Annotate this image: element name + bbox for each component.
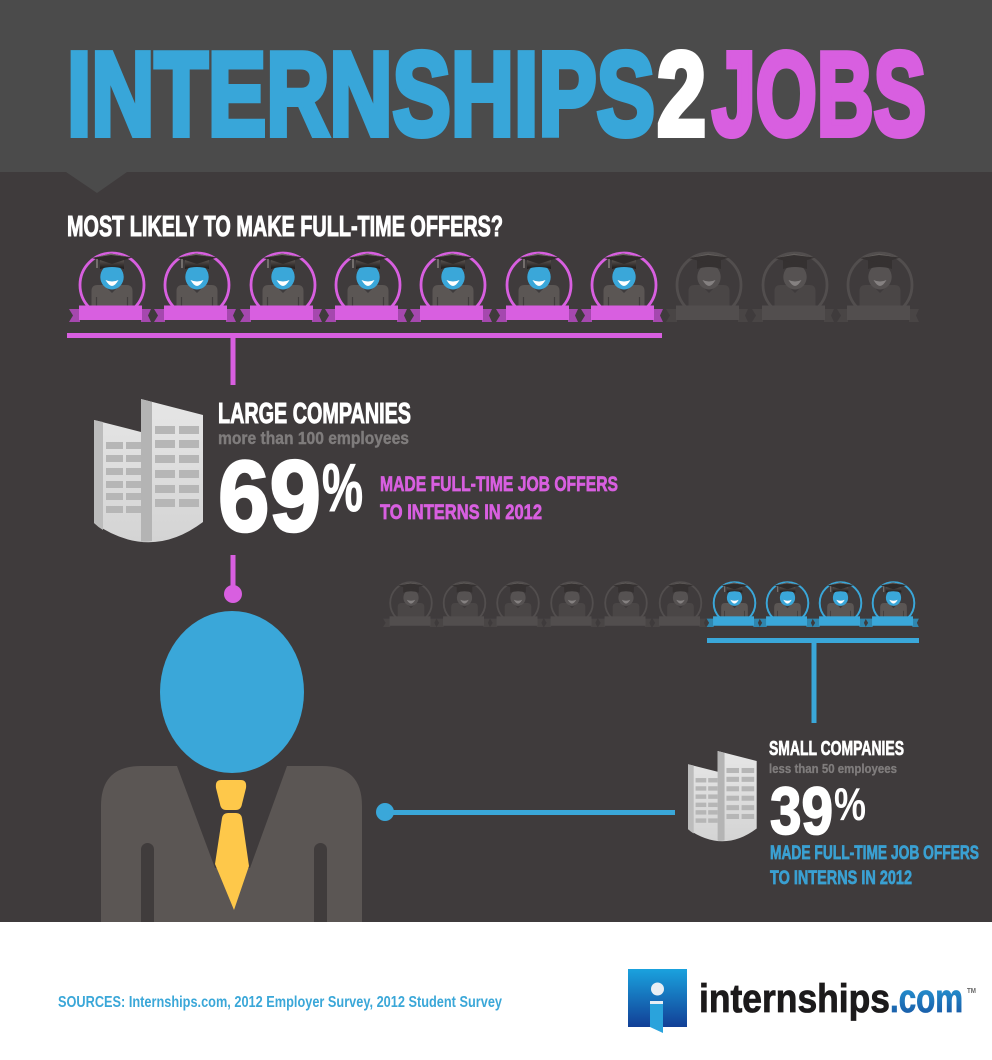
connector: pink bracket bbox=[67, 336, 662, 385]
connector: blue line with dot bbox=[376, 803, 675, 821]
large companies text block bbox=[218, 398, 618, 553]
large companies text block: % bbox=[322, 450, 363, 526]
small companies text block bbox=[769, 738, 979, 889]
large companies text block: more than 100 employees bbox=[218, 428, 409, 448]
header banner bbox=[0, 0, 992, 193]
large companies text block: 69 bbox=[218, 441, 321, 553]
title: INTERNSHIPS bbox=[67, 28, 655, 161]
small companies text block: TO INTERNS IN 2012 bbox=[770, 867, 912, 889]
icon row: small companies, 4 of 10 graduates bbox=[383, 582, 919, 627]
footer background bbox=[0, 922, 992, 1060]
small companies text block: less than 50 employees bbox=[769, 761, 897, 776]
title: 2 bbox=[657, 28, 706, 161]
large companies text block: MADE FULL-TIME JOB OFFERS bbox=[380, 473, 618, 496]
logo wordmark: internships bbox=[699, 977, 890, 1021]
head bbox=[160, 611, 304, 773]
icon: large building bbox=[94, 399, 203, 542]
connector: pink line with dot bbox=[224, 555, 242, 603]
logo: internships.com bbox=[628, 969, 976, 1033]
logo: internships.com: .com bbox=[890, 977, 963, 1021]
icon row: large companies, 7 of 10 graduates bbox=[69, 253, 919, 322]
logo mark bbox=[628, 969, 687, 1033]
connector: blue bracket bbox=[707, 640, 919, 723]
tie bbox=[215, 780, 249, 910]
sources text: SOURCES: Internships.com, 2012 Employer Survey, 2012 Student Survey bbox=[58, 994, 502, 1011]
large companies text block: LARGE COMPANIES bbox=[218, 398, 411, 430]
small companies text block: 39 bbox=[770, 774, 833, 849]
logo: internships.com: TM bbox=[967, 988, 976, 995]
suit bbox=[101, 766, 362, 922]
large companies text block: TO INTERNS IN 2012 bbox=[380, 501, 542, 524]
small companies text block: SMALL COMPANIES bbox=[769, 738, 904, 760]
person figure with suit and tie bbox=[101, 611, 362, 922]
section heading: MOST LIKELY TO MAKE FULL-TIME OFFERS? bbox=[67, 211, 503, 243]
small companies text block: % bbox=[834, 778, 866, 830]
icon: small building bbox=[688, 751, 757, 841]
